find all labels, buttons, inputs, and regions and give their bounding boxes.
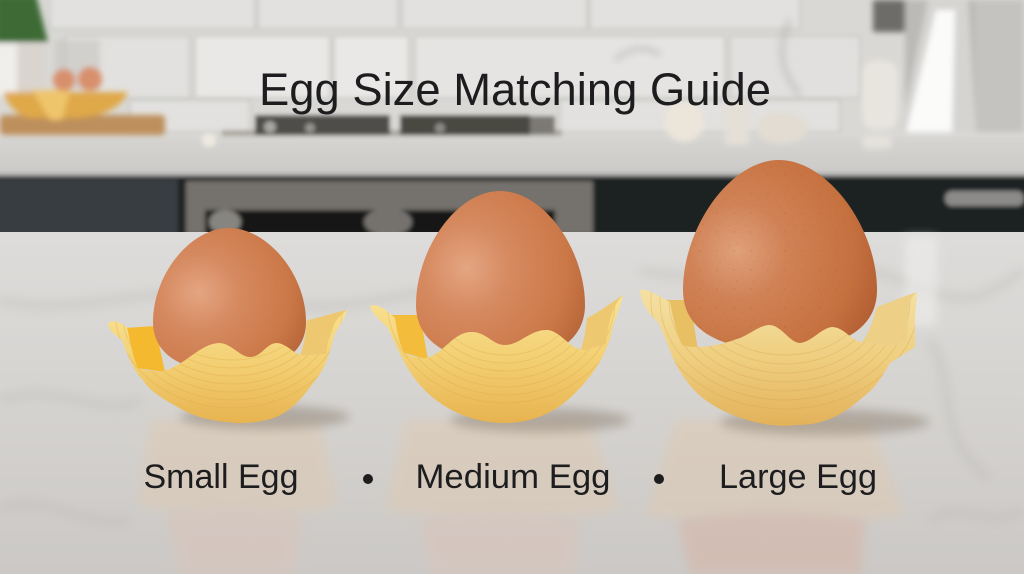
cup front (640, 290, 917, 426)
stove burners (222, 115, 562, 139)
icon: small egg (153, 228, 306, 372)
icon: medium egg (416, 191, 585, 362)
icon: large egg (683, 160, 877, 350)
dark cabinets (0, 176, 1024, 236)
cup inner (662, 292, 917, 350)
separator dot (654, 474, 664, 484)
medium egg cup (360, 191, 630, 432)
cup inner (125, 310, 347, 372)
cup front (108, 310, 347, 424)
countertop ledge (0, 136, 1024, 177)
cup shadow (180, 405, 350, 429)
kitchen background (0, 0, 1024, 236)
label: small egg: Small Egg (144, 458, 298, 496)
title: Egg Size Matching Guide (259, 64, 771, 115)
separator dot (363, 474, 373, 484)
plant and bowl (0, 0, 165, 135)
reflections (138, 420, 905, 574)
small egg cup (108, 228, 352, 433)
label: medium egg: Medium Egg (416, 458, 610, 496)
marble veins on wall (615, 20, 800, 95)
large egg cup (630, 160, 930, 435)
cup inner (390, 295, 623, 360)
appliances (664, 0, 1024, 149)
label: large egg: Large Egg (719, 458, 877, 496)
cup front (370, 295, 623, 423)
cup shadow (450, 408, 630, 432)
marble counter (0, 232, 1024, 574)
cup shadow (720, 409, 930, 435)
